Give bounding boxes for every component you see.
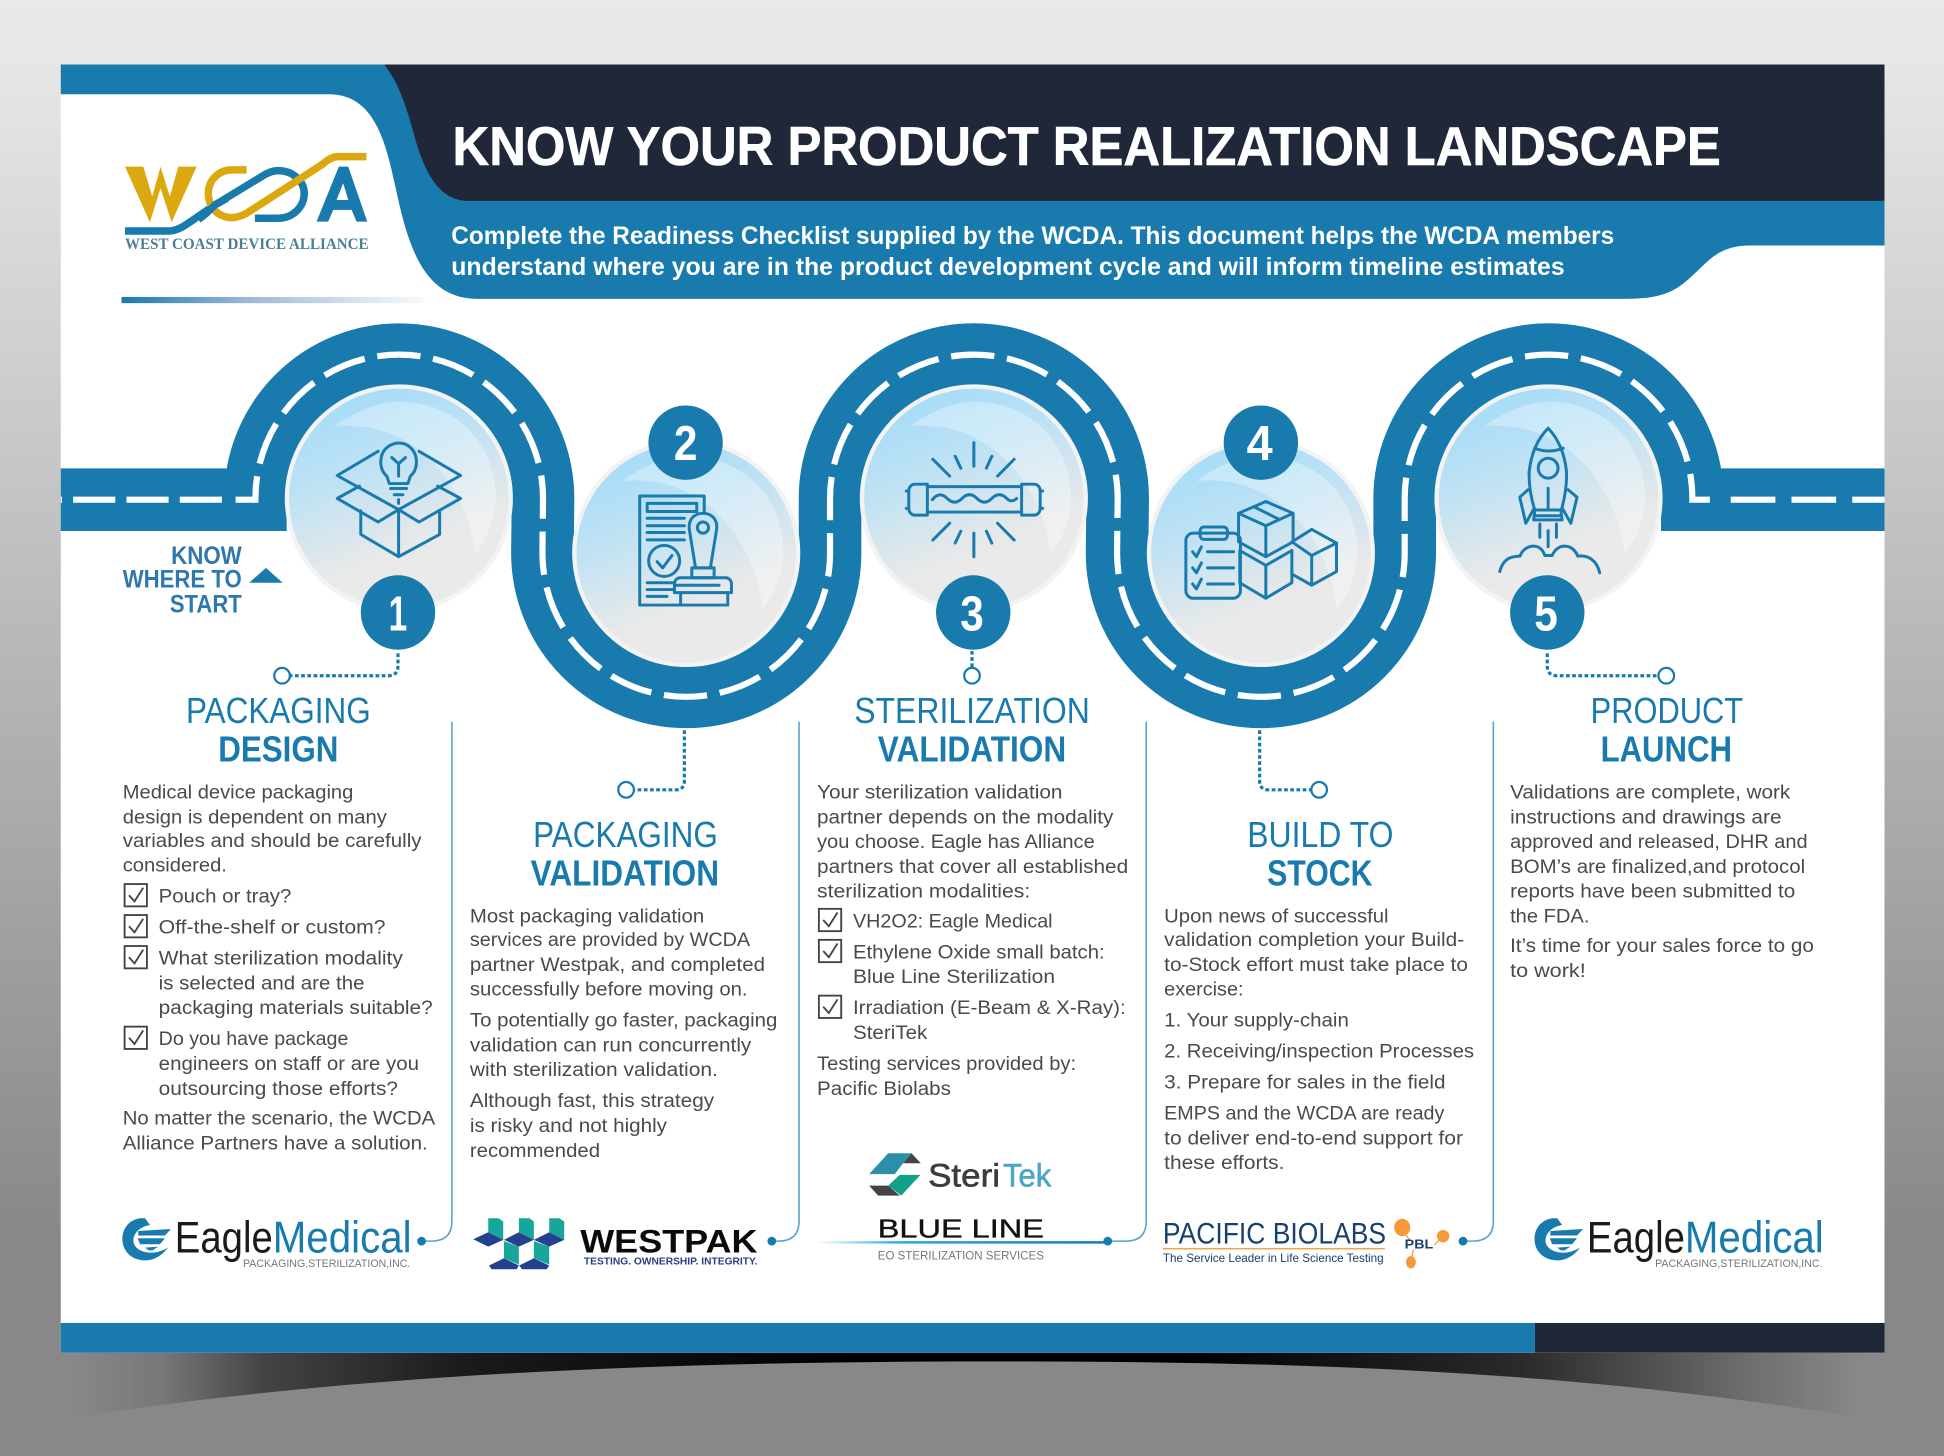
logo: Pacific Biolabs: PACIFIC BIOLABS [1163, 1218, 1386, 1251]
body text: to work! [1510, 960, 1586, 982]
bubble 5 [1434, 384, 1663, 613]
intro text: Your sterilization validation [817, 781, 1063, 803]
logo: Blue Line [817, 1213, 1105, 1263]
column separator 3 [1103, 722, 1146, 1245]
logo: Eagle Medical (column 1): Medical [273, 1213, 412, 1262]
body text: It’s time for your sales force to go [1510, 935, 1814, 957]
logo: Eagle Medical (column 5): Eagle [1587, 1213, 1685, 1262]
intro text: you choose. Eagle has Alliance [817, 831, 1095, 853]
heading [1591, 690, 1743, 769]
body text: these efforts. [1164, 1152, 1284, 1174]
heading [531, 814, 719, 893]
body text: is risky and not highly [470, 1115, 667, 1137]
bubble 2 [572, 439, 800, 667]
body text: 3. Prepare for sales in the field [1164, 1072, 1446, 1094]
body text: approved and released, DHR and [1510, 831, 1808, 853]
checklist [159, 886, 433, 1100]
column 1: packaging design [123, 690, 436, 1154]
know where to start label [123, 543, 283, 619]
logo: WCDA [125, 157, 369, 253]
logo: Pacific Biolabs: The Service Leader in Life Science Testing [1163, 1251, 1384, 1265]
body text: to deliver end-to-end support for [1164, 1127, 1463, 1149]
body text: 2. Receiving/inspection Processes [1164, 1041, 1474, 1063]
heading: VALIDATION [531, 852, 719, 893]
logo: Blue Line: BLUE LINE [878, 1213, 1044, 1243]
logo: Eagle Medical (column 5) [1534, 1213, 1824, 1270]
badge 4: 4 [1247, 415, 1273, 471]
logo: Westpak: TESTING. OWNERSHIP. INTEGRITY. [584, 1257, 758, 1268]
column separator 2 [767, 722, 799, 1245]
badge 3: 3 [960, 585, 984, 641]
body text: instructions and drawings are [1510, 806, 1782, 828]
logo: SteriTek [869, 1153, 1052, 1196]
heading: STERILIZATION [854, 690, 1090, 731]
column 5: product launch [1510, 690, 1814, 982]
winding road [61, 355, 1884, 697]
badge 2 [648, 405, 723, 480]
know where to start label: KNOW [171, 543, 242, 570]
checklist: Off-the-shelf or custom? [159, 917, 386, 939]
checkboxes [125, 884, 147, 1049]
heading: DESIGN [218, 728, 338, 769]
body text: Validations are complete, work [1510, 781, 1790, 803]
body text [1164, 905, 1474, 1174]
body text: 1. Your supply-chain [1164, 1010, 1349, 1032]
bubble 3 [860, 384, 1088, 613]
closing text: No matter the scenario, the WCDA [123, 1108, 436, 1130]
heading [854, 690, 1090, 769]
icon: clipboard and stock boxes [1186, 502, 1336, 598]
logo: Westpak: WESTPAK [580, 1223, 758, 1259]
logo: Blue Line: EO STERILIZATION SERVICES [878, 1250, 1044, 1263]
body text: services are provided by WCDA [470, 929, 751, 951]
subtitle [451, 223, 1614, 281]
heading: VALIDATION [878, 728, 1066, 769]
badge 4 [1224, 405, 1298, 480]
logo: SteriTek: Steri [928, 1158, 1000, 1194]
body text [1510, 781, 1814, 982]
body text: BOM’s are finalized,and protocol [1510, 856, 1805, 878]
logo: Eagle Medical (column 1): Eagle [175, 1213, 273, 1262]
logo: Westpak [473, 1218, 758, 1269]
column separator 4 [1459, 722, 1493, 1245]
bubble 1 [285, 384, 513, 613]
logo: Eagle Medical (column 1) [122, 1213, 412, 1270]
checklist: engineers on staff or are you [159, 1053, 419, 1075]
heading: BUILD TO [1247, 814, 1394, 855]
checkboxes [819, 909, 841, 1018]
closing text [123, 1108, 436, 1154]
connector 5 [1547, 653, 1674, 684]
checklist: Blue Line Sterilization [853, 966, 1055, 988]
intro text [123, 781, 422, 877]
column 3: sterilization validation [817, 690, 1128, 1100]
intro text: design is dependent on many [123, 806, 387, 828]
logo: Eagle Medical (column 1): PACKAGING,STERILIZATION,INC. [243, 1258, 410, 1270]
body text: successfully before moving on. [470, 979, 748, 1001]
body text: reports have been submitted to [1510, 881, 1795, 903]
connector 1 [274, 653, 398, 684]
checklist: Do you have package [159, 1028, 348, 1050]
footer bar [61, 1323, 1884, 1353]
body text: validation completion your Build- [1164, 929, 1464, 951]
column 4: build to stock [1164, 814, 1474, 1174]
testing text: Testing services provided by: [817, 1053, 1076, 1075]
body text: with sterilization validation. [469, 1059, 718, 1081]
logo: Eagle Medical (column 5): PACKAGING,STERILIZATION,INC. [1655, 1258, 1822, 1270]
checklist: outsourcing those efforts? [159, 1078, 398, 1100]
connector 3 [964, 651, 980, 684]
know where to start label: START [170, 592, 242, 619]
body text: exercise: [1164, 979, 1244, 1001]
road surface [61, 355, 1884, 697]
body text [469, 905, 777, 1162]
blue header shape [61, 64, 1884, 299]
heading: PACKAGING [186, 690, 371, 731]
title: KNOW YOUR PRODUCT REALIZATION LANDSCAPE [453, 116, 1721, 177]
body text: Upon news of successful [1164, 905, 1389, 927]
testing text: Pacific Biolabs [817, 1078, 951, 1100]
logo: Eagle Medical (column 5): Medical [1685, 1213, 1824, 1262]
badge 3 [936, 575, 1010, 650]
intro text: considered. [123, 855, 227, 877]
connector 4 [1260, 730, 1327, 798]
closing text: Alliance Partners have a solution. [123, 1132, 428, 1154]
checklist: is selected and are the [159, 972, 365, 994]
heading: LAUNCH [1601, 728, 1732, 769]
heading [186, 690, 371, 769]
badge 5 [1510, 575, 1584, 650]
icon: document and stamp [640, 496, 731, 605]
body text: recommended [470, 1140, 600, 1162]
intro text: partner depends on the modality [817, 806, 1113, 828]
header band [61, 64, 1884, 299]
badge 5: 5 [1534, 585, 1558, 641]
checklist [853, 910, 1126, 1044]
heading: STOCK [1267, 852, 1372, 893]
intro text: variables and should be carefully [123, 830, 422, 852]
checklist: Pouch or tray? [159, 886, 291, 908]
bubble 4 [1147, 439, 1375, 667]
body text: to-Stock effort must take place to [1164, 954, 1468, 976]
body text: To potentially go faster, packaging [470, 1010, 777, 1032]
checklist: SteriTek [853, 1022, 927, 1044]
heading [1247, 814, 1394, 893]
icon: UV tube [906, 443, 1043, 557]
body text: Most packaging validation [470, 905, 704, 927]
heading: PACKAGING [533, 814, 718, 855]
logo: SteriTek: Tek [1003, 1158, 1052, 1194]
intro text: partners that cover all established [817, 856, 1128, 878]
checklist: Irradiation (E-Beam & X-Ray): [853, 997, 1126, 1019]
know where to start label: WHERE TO [123, 567, 242, 594]
logo: WCDA: WEST COAST DEVICE ALLIANCE [125, 236, 369, 253]
intro text [817, 781, 1128, 903]
body text: partner Westpak, and completed [470, 954, 765, 976]
badge 1: 1 [389, 585, 407, 641]
body text: EMPS and the WCDA are ready [1164, 1103, 1444, 1125]
body text: the FDA. [1510, 905, 1589, 927]
testing text [817, 1053, 1076, 1100]
body text: validation can run concurrently [470, 1034, 751, 1056]
logo: Pacific Biolabs [1163, 1218, 1449, 1268]
checklist: Ethylene Oxide small batch: [853, 941, 1105, 963]
column 2: packaging validation [469, 814, 777, 1162]
road centre dashes [399, 355, 1716, 697]
intro text: sterilization modalities: [817, 881, 1030, 903]
badge 1 [361, 575, 435, 650]
logo underline [122, 297, 435, 303]
intro text: Medical device packaging [123, 781, 353, 803]
checklist: What sterilization modality [159, 948, 403, 970]
heading: PRODUCT [1591, 690, 1743, 731]
panel drop shadow [61, 1353, 1884, 1417]
badge 2: 2 [674, 415, 697, 471]
subtitle: Complete the Readiness Checklist supplied by the WCDA. This document helps the WCDA members [451, 223, 1614, 250]
logo: Pacific Biolabs: PBL [1405, 1237, 1433, 1252]
body text: Although fast, this strategy [470, 1090, 714, 1112]
icon: rocket launch [1500, 428, 1600, 573]
column separator 1 [417, 722, 452, 1245]
dark title block [384, 64, 1884, 201]
checklist: VH2O2: Eagle Medical [853, 910, 1053, 932]
subtitle: understand where you are in the product development cycle and will inform timeline estimates [451, 254, 1565, 281]
icon: open box with light bulb [337, 443, 461, 557]
checklist: packaging materials suitable? [159, 997, 433, 1019]
connector 2 [618, 730, 684, 798]
